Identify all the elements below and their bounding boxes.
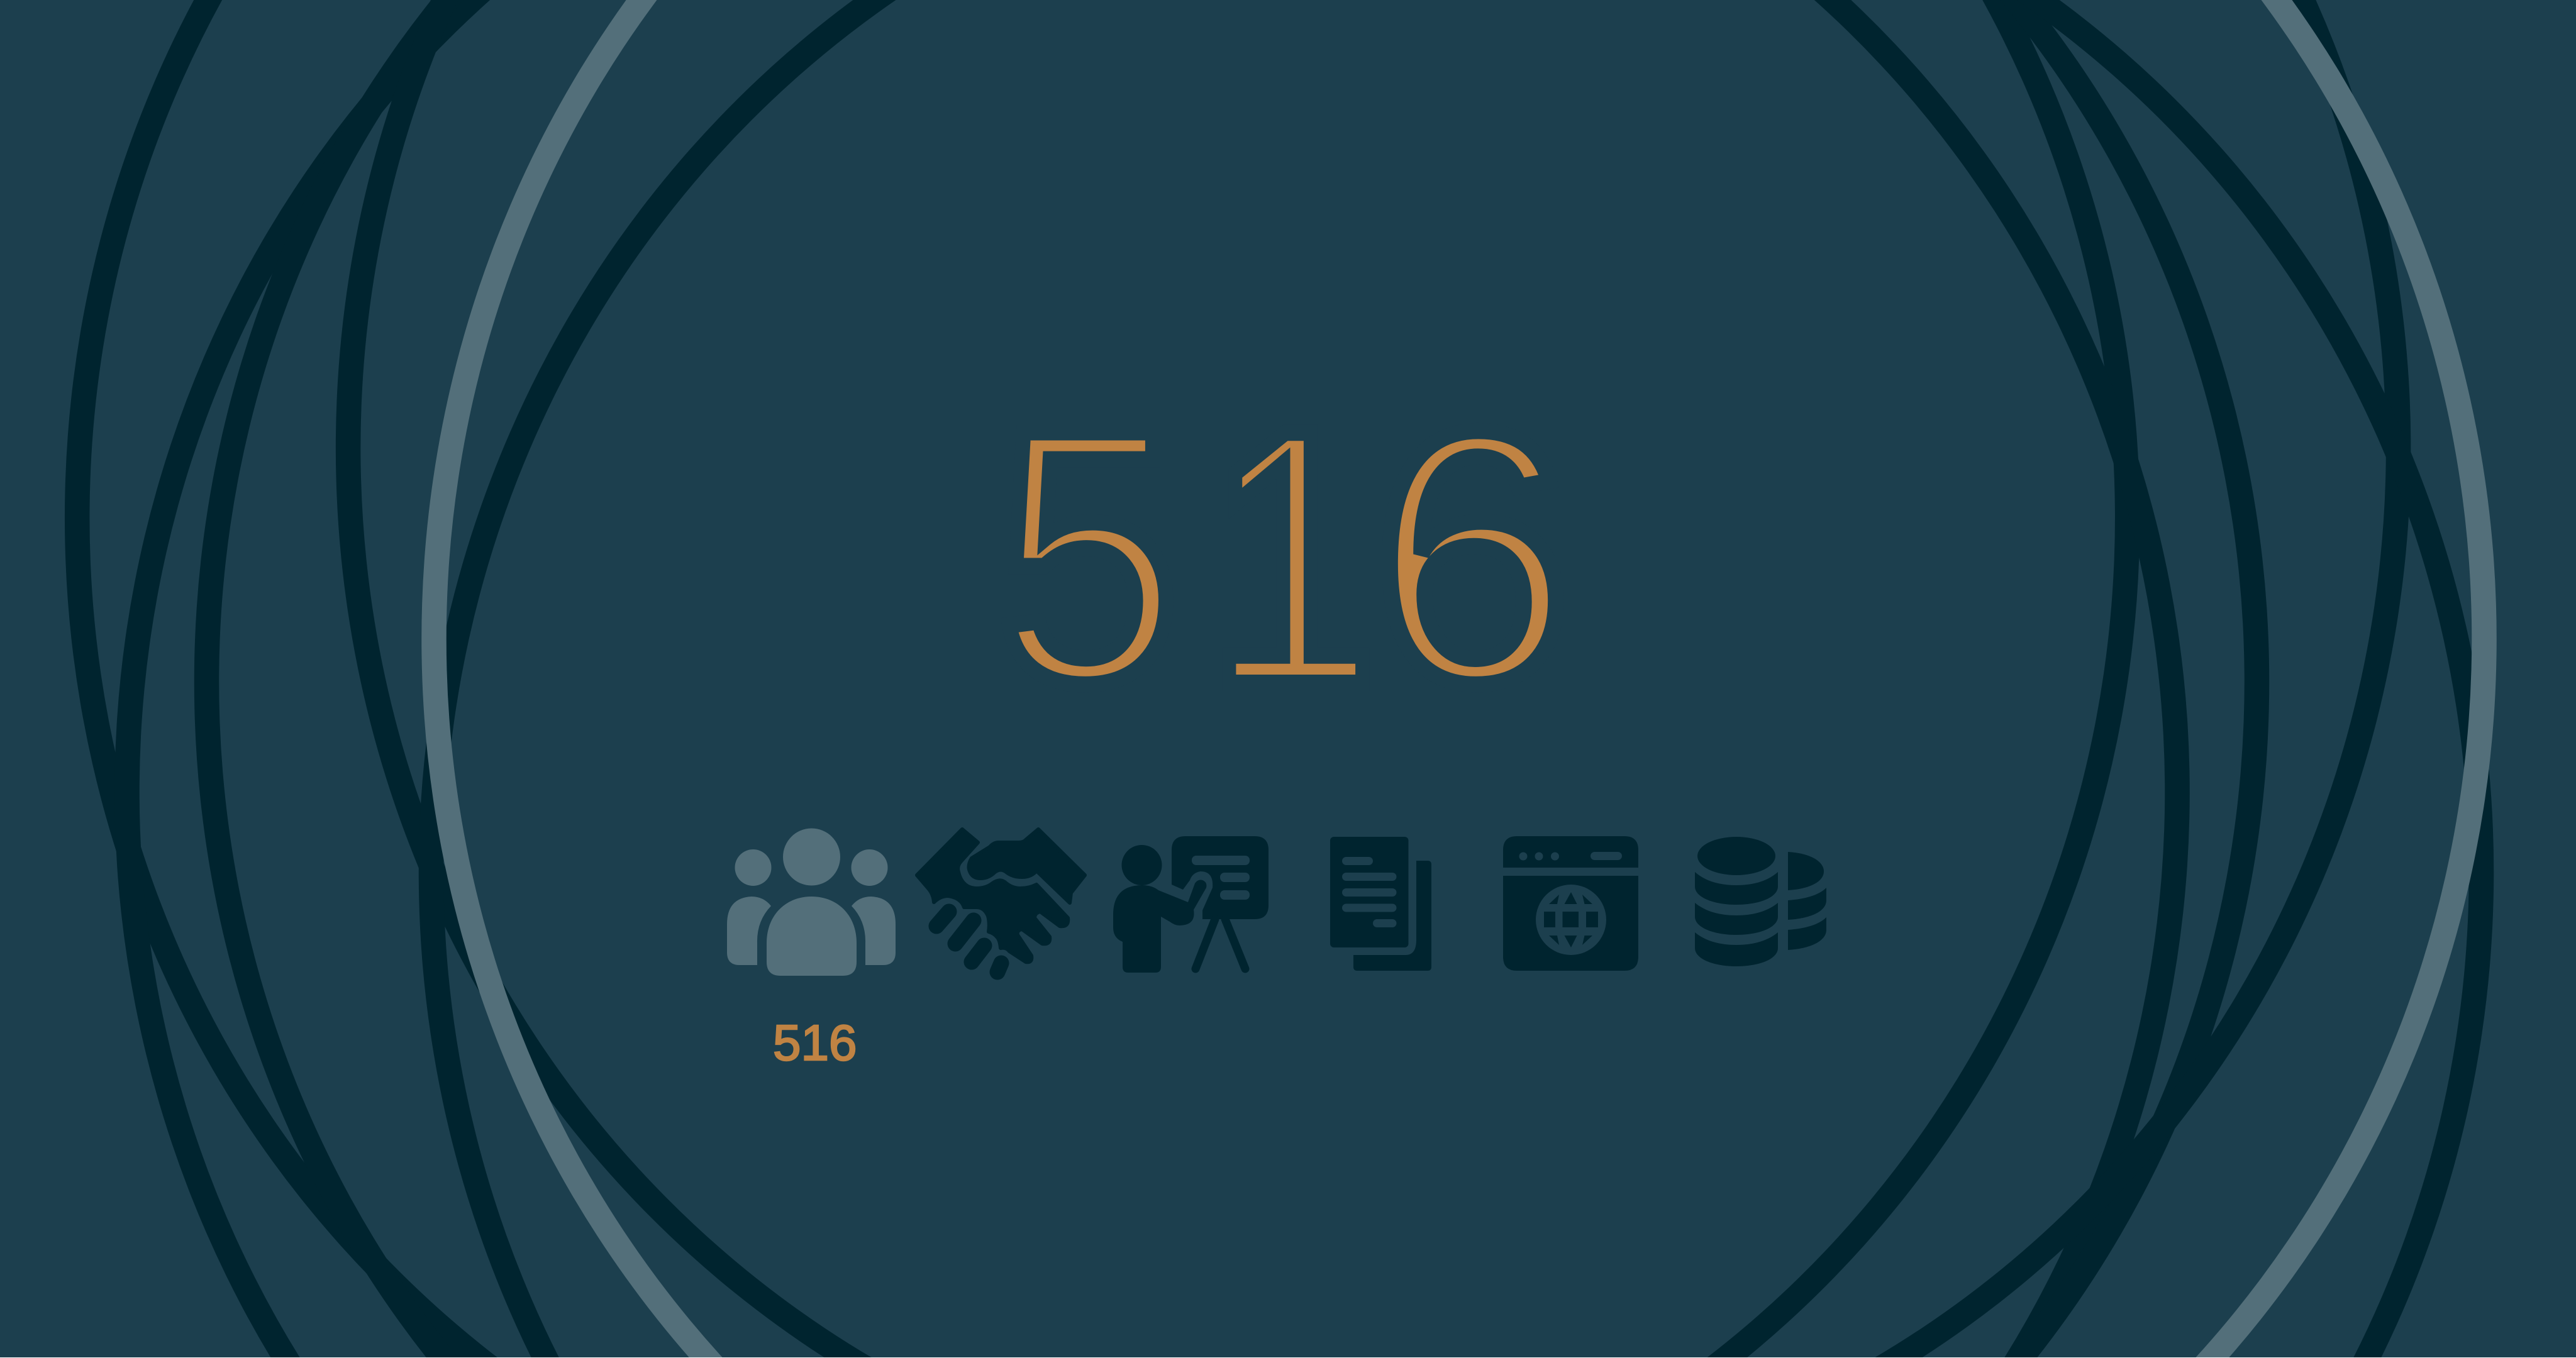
icon: coin stacks — [1695, 837, 1826, 966]
icon: presenter at board — [1113, 836, 1269, 973]
big number 516: 1 — [1206, 353, 1377, 760]
icon: handshake — [917, 829, 1085, 972]
icon: browser window with globe — [1503, 836, 1638, 971]
icon: documents — [1330, 837, 1431, 971]
big number 516: 6 — [1372, 356, 1572, 757]
label: 516 under people icon: 516 — [773, 1015, 857, 1071]
icon: people group — [727, 829, 896, 976]
big number 516: 5 — [996, 354, 1180, 758]
big number 516 — [996, 353, 1572, 760]
